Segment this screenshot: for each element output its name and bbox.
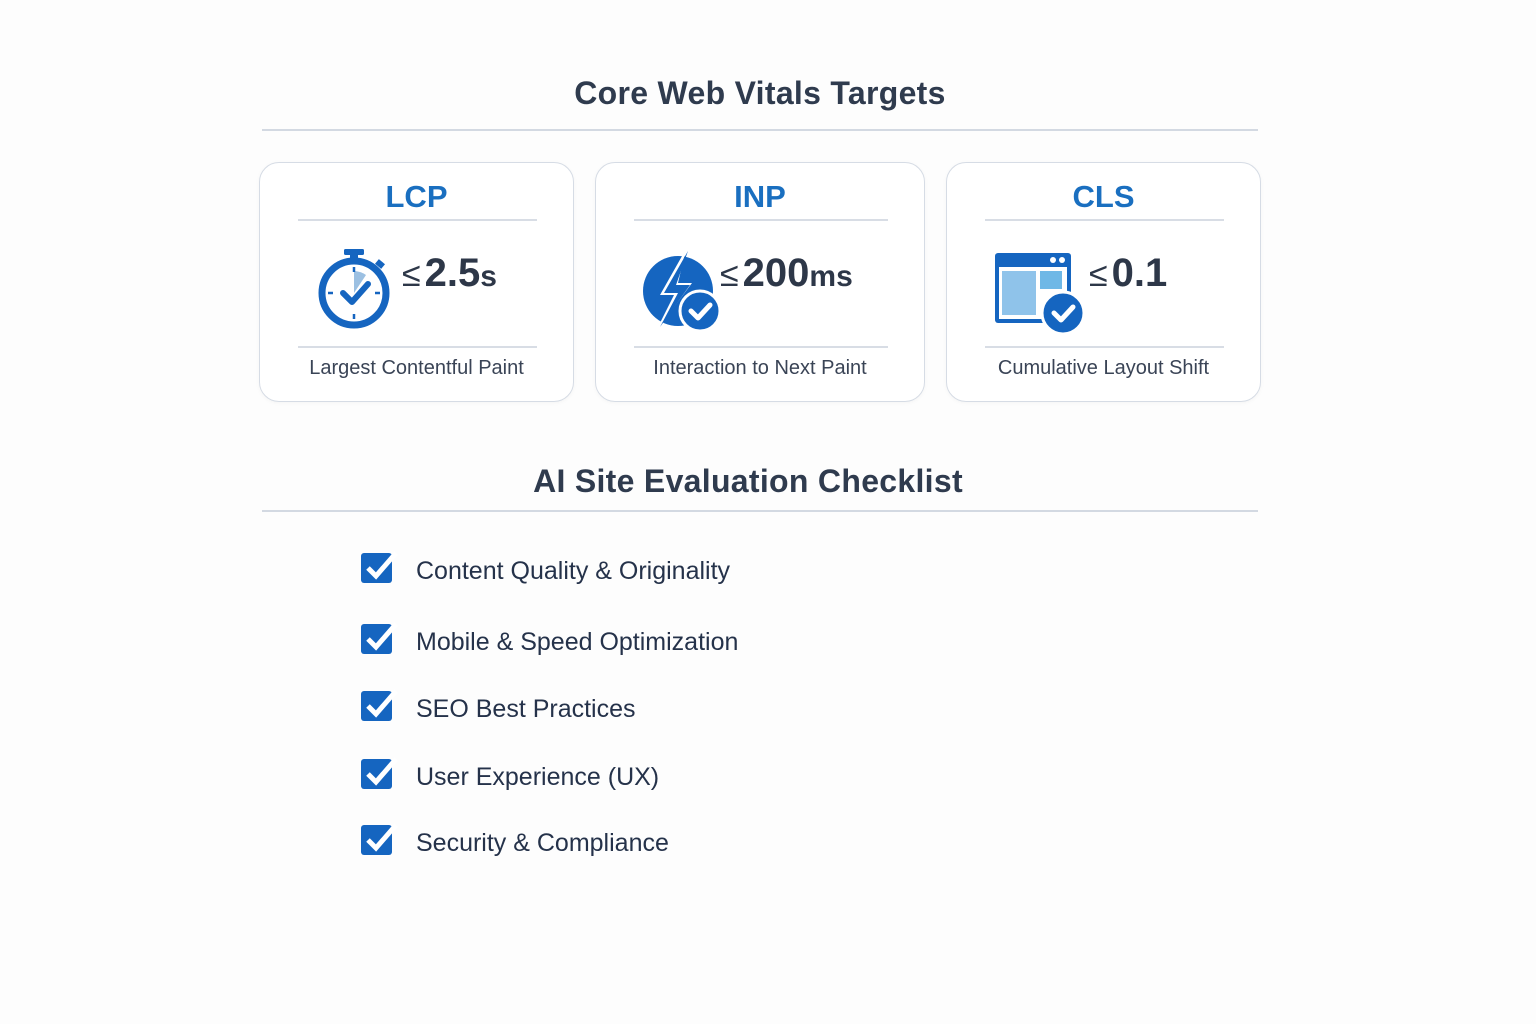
panel: INP	[595, 162, 925, 402]
item: ux: User Experience (UX)	[416, 763, 659, 791]
title: checklist: AI Site Evaluation Checklist	[533, 463, 963, 499]
value: 0.1: ≤0.1	[1089, 251, 1167, 295]
icon: stopwatch	[318, 249, 390, 328]
icon: lightning	[643, 251, 718, 330]
item: mobile: Mobile & Speed Optimization	[416, 628, 738, 656]
heading: INP: INP	[734, 179, 786, 214]
title: core web vitals: Core Web Vitals Targets	[574, 75, 946, 111]
value: 200ms: ≤200ms	[720, 251, 853, 295]
subtitle: Interaction to Next Paint	[653, 357, 867, 379]
icon: layout window	[995, 253, 1082, 332]
item: seo: SEO Best Practices	[416, 695, 636, 723]
item: seo	[361, 691, 636, 723]
item: security: Security & Compliance	[416, 829, 669, 857]
heading: CLS: CLS	[1072, 179, 1134, 214]
item: content quality: Content Quality & Originality	[416, 557, 730, 585]
subtitle: Largest Contentful Paint	[309, 357, 524, 379]
checklist	[361, 553, 738, 857]
panel: CLS	[946, 162, 1261, 402]
panel: LCP	[259, 162, 574, 402]
value: 2.5s: ≤2.5s	[402, 251, 497, 295]
heading: LCP: LCP	[386, 179, 448, 214]
subtitle: Cumulative Layout Shift	[998, 357, 1209, 379]
